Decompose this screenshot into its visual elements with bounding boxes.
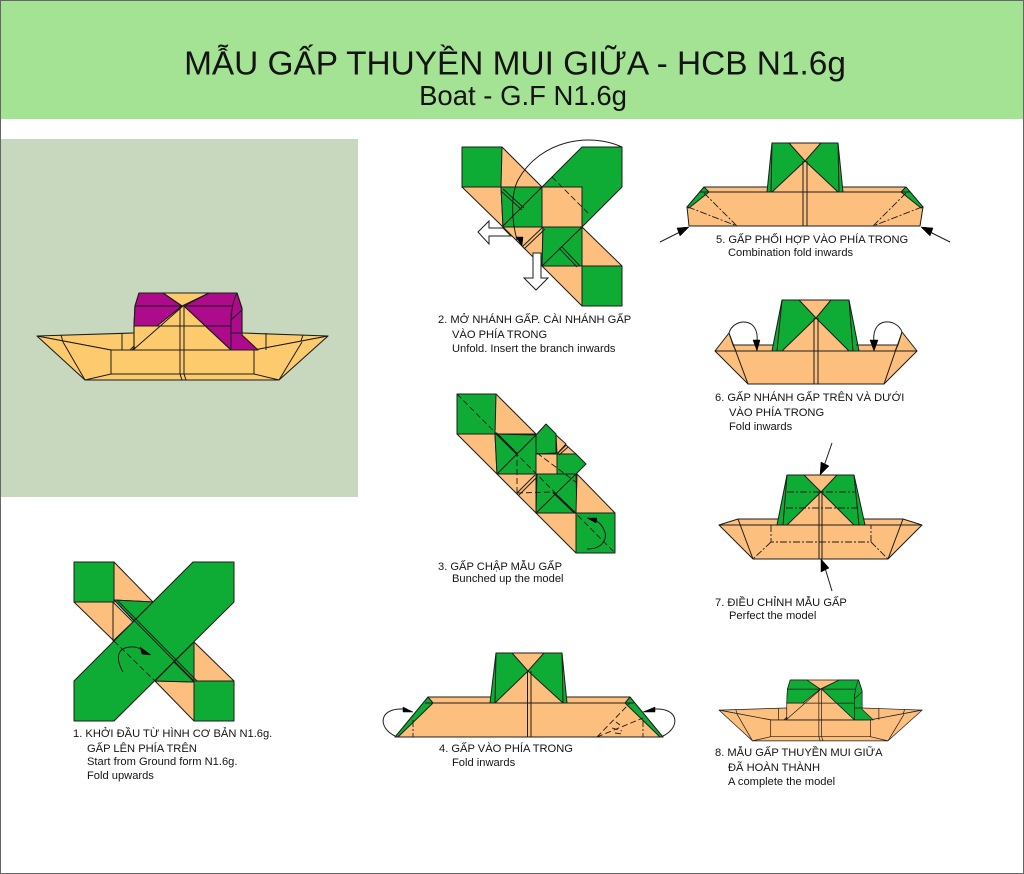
- caption step 4: [439, 742, 573, 769]
- cabin body: [134, 293, 242, 350]
- caption step 8: A complete the model: [728, 776, 835, 788]
- caption step 8: ĐÃ HOÀN THÀNH: [728, 761, 820, 774]
- caption step 2: [438, 313, 631, 355]
- right push arrow: [921, 227, 950, 242]
- bottom arrow: [821, 559, 832, 591]
- caption step 8: 8. MẪU GẤP THUYỀN MUI GIỮA: [715, 746, 883, 759]
- caption step 3: [438, 560, 564, 585]
- left arc arrow: [729, 322, 760, 351]
- caption step 8: [715, 746, 883, 788]
- caption step 4: 4. GẤP VÀO PHÍA TRONG: [439, 742, 573, 755]
- fold lines: [61, 293, 303, 380]
- main green band: [74, 562, 234, 721]
- caption step 6: Fold inwards: [729, 421, 793, 433]
- caption step 5: 5. GẤP PHỐI HỢP VÀO PHÍA TRONG: [716, 232, 908, 246]
- step 2: unfold and insert: [462, 140, 622, 306]
- step 7: perfect the model: [719, 443, 922, 591]
- caption step 2: 2. MỞ NHÁNH GẤP. CÀI NHÁNH GẤP: [438, 313, 631, 326]
- caption step 2: Unfold. Insert the branch inwards: [452, 343, 616, 355]
- title: MẪU GẤP THUYỀN MUI GIỮA - HCB N1.6g: [184, 44, 846, 82]
- caption step 1: 1. KHỞI ĐẦU TỪ HÌNH CƠ BẢN N1.6g.: [73, 727, 272, 740]
- left push arrow: [660, 227, 689, 242]
- caption step 6: 6. GẤP NHÁNH GẤP TRÊN VÀ DƯỚI: [715, 391, 904, 404]
- caption step 1: GẤP LÊN PHÍA TRÊN: [87, 742, 197, 755]
- top-left square: [74, 562, 114, 602]
- large arc arrow: [513, 140, 622, 246]
- step 1: starting cross form: [74, 562, 234, 721]
- caption step 3: 3. GẤP CHẬP MẪU GẤP: [438, 560, 562, 573]
- caption step 6: [715, 391, 904, 433]
- caption step 1: [73, 727, 272, 782]
- header band: [0, 0, 1024, 119]
- caption step 1: Start from Ground form N1.6g.: [87, 756, 237, 768]
- caption step 5: [716, 232, 908, 259]
- panel: finished purple boat: [0, 139, 358, 497]
- step 8: completed green boat: [719, 680, 922, 741]
- caption step 4: Fold inwards: [452, 757, 516, 769]
- caption step 1: Fold upwards: [87, 770, 154, 782]
- step 6: fold top and bottom branches: [715, 300, 917, 384]
- caption step 2: VÀO PHÍA TRONG: [452, 328, 547, 341]
- right arc arrow: [870, 322, 902, 351]
- caption step 7: Perfect the model: [729, 610, 816, 622]
- subtitle: Boat - G.F N1.6g: [419, 80, 627, 111]
- step 3: bunch up: [457, 394, 615, 553]
- caption step 7: [715, 596, 847, 622]
- caption step 5: Combination fold inwards: [728, 247, 854, 259]
- curved arrow: [587, 518, 605, 549]
- step 5: combination fold: [660, 143, 950, 242]
- purple left panel: [134, 293, 182, 326]
- purple right panel: [184, 293, 258, 350]
- right arc arrow: [643, 707, 675, 736]
- caption step 3: Bunched up the model: [452, 573, 564, 585]
- caption step 7: 7. ĐIỀU CHỈNH MẪU GẤP: [715, 596, 847, 609]
- left arc arrow: [383, 707, 413, 736]
- top arrow: [820, 443, 832, 475]
- left hollow arrow: [478, 221, 511, 244]
- step 4: fold inwards: [383, 653, 675, 737]
- hull back: [37, 333, 328, 350]
- curved arrow: [118, 647, 151, 672]
- down hollow arrow: [524, 253, 548, 290]
- caption step 6: VÀO PHÍA TRONG: [729, 406, 824, 419]
- bottom-right square: [194, 681, 234, 721]
- hull front: [37, 336, 328, 380]
